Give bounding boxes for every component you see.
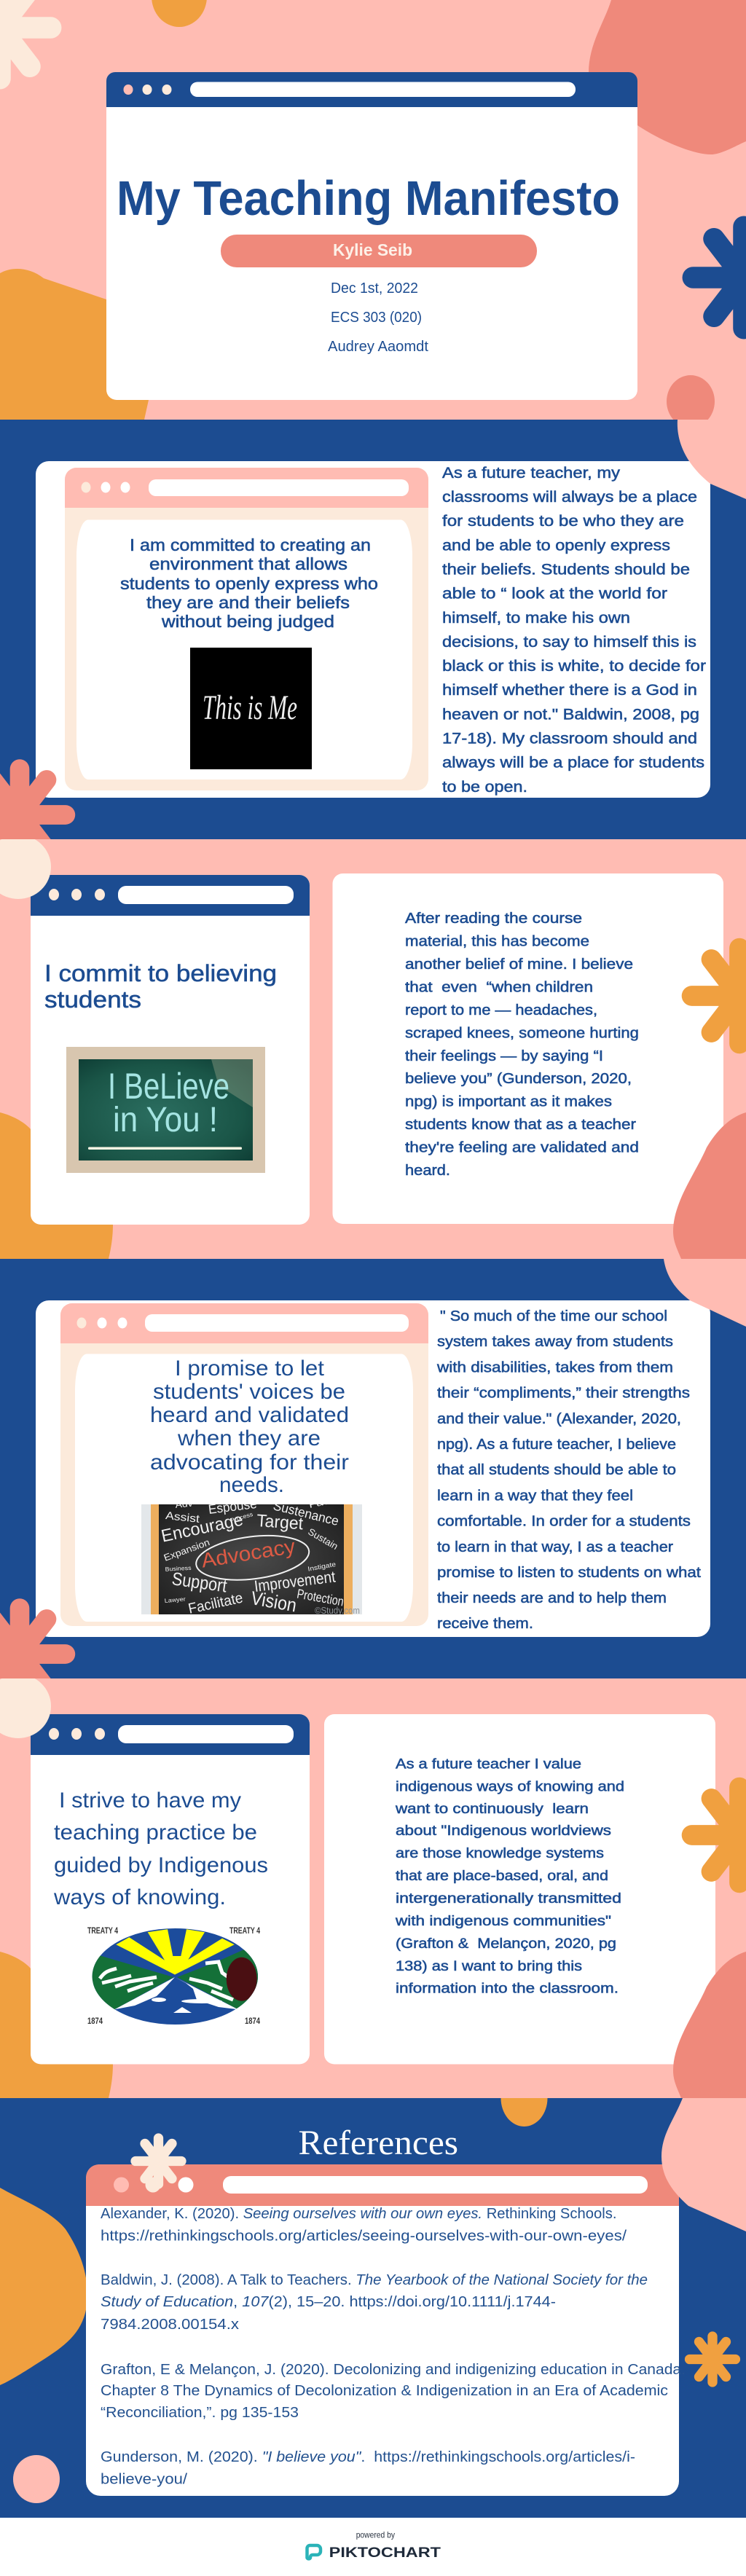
body text: intergenerationally transmitted (396, 1890, 621, 1907)
panel: title section (0, 0, 746, 428)
footer: powered by Piktochart: PIKTOCHART (329, 2545, 441, 2561)
image: advocacy chalkboard: Assist (165, 1509, 201, 1525)
image: advocacy chalkboard: Expansion (162, 1536, 211, 1563)
body text (395, 1756, 624, 1996)
image: advocacy chalkboard: Sustain (306, 1526, 340, 1552)
quote text (442, 464, 706, 796)
body text: are those knowledge systems (396, 1845, 604, 1861)
body text: want to continuously learn (395, 1801, 589, 1817)
quote text: " So much of the time our school (440, 1308, 667, 1324)
circle: orange top (152, 0, 207, 27)
blob: salmon top right (589, 0, 746, 154)
icon: salmon flower (0, 769, 66, 860)
reference list: Baldwin, J. (2008). A Talk to Teachers. The Yearbook of the National Society for the (101, 2271, 648, 2288)
image: chalkboard I Believe in You: I BeLieve (108, 1066, 229, 1107)
reference list: believe-you/ (101, 2471, 187, 2487)
right text card (332, 873, 723, 1224)
quote text: with disabilities, takes from them (436, 1359, 673, 1375)
image: advocacy chalkboard: Encourage (160, 1509, 245, 1547)
quote text: black or this is white, to decide for (442, 657, 706, 675)
reference list: Grafton, E & Melançon, J. (2020). Decolonizing and indigenizing education in Canada. (101, 2361, 686, 2378)
reference list: Chapter 8 The Dynamics of Decolonization & Indigenization in an Era of Academic (101, 2382, 668, 2399)
promise statement: advocating for their (150, 1450, 349, 1474)
body text: they're feeling are validated and (405, 1139, 639, 1155)
quote text: receive them. (437, 1615, 533, 1632)
blob: pink top right (678, 420, 746, 499)
references window (86, 2164, 686, 2496)
quote text: system takes away from students (437, 1333, 673, 1350)
commitment statement: students to openly express who (120, 574, 378, 593)
blob: salmon right (673, 1952, 746, 2098)
body text: their feelings — by saying “I (405, 1048, 603, 1064)
promise statement: needs. (219, 1473, 284, 1497)
body text: material, this has become (405, 934, 589, 950)
body text: report to me — headaches, (405, 1002, 597, 1018)
quote text: their needs are and to help them (437, 1590, 667, 1606)
icon: orange flower (690, 2336, 735, 2382)
right text card (324, 1714, 715, 2065)
circle: orange top (501, 2070, 548, 2127)
body text: students know that as a teacher (405, 1117, 636, 1133)
image: advocacy chalkboard: Improvement (254, 1567, 337, 1595)
reference list: Study of Education , 107(2), 15–20. https://doi.org/10.1111/j.1744- (101, 2293, 556, 2310)
heading (45, 964, 275, 1008)
heading (53, 1788, 268, 1909)
image: advocacy chalkboard: Instigate (307, 1560, 337, 1573)
circle: pink bottom left (13, 2455, 60, 2503)
outer white card (36, 1300, 710, 1637)
circle: cream top left (0, 1674, 51, 1738)
image: advocacy chalkboard: Fav (308, 1495, 331, 1510)
blob: orange bottom left (0, 269, 149, 420)
quote text: 17-18). My classroom should and (442, 730, 697, 747)
promise statement (150, 1356, 349, 1497)
browser window (65, 468, 428, 790)
circle: salmon lower right (667, 375, 715, 420)
quote text: himself, to make his own (442, 609, 630, 627)
heading: students (44, 986, 141, 1013)
promise statement: I promise to let (175, 1356, 325, 1381)
panel: commitment three (0, 1259, 746, 1700)
reference list: https://rethinkingschools.org/articles/seeing-ourselves-with-our-own-eyes/ (101, 2228, 627, 2244)
image: advocacy chalkboard: Sustenance (272, 1498, 340, 1528)
image: advocacy chalkboard: Target (256, 1511, 304, 1534)
image: advocacy chalkboard: Process (229, 1511, 254, 1524)
quote text (436, 1308, 701, 1632)
image: advocacy chalkboard: ©Study.com (315, 1605, 360, 1616)
reference list: “Reconciliation,”. pg 135-153 (101, 2404, 299, 2421)
body text: scraped knees, someone hurting (405, 1026, 639, 1042)
commitment statement: environment that allows (149, 554, 348, 573)
quote text: and be able to openly express (442, 536, 670, 554)
body text: heard. (405, 1163, 450, 1179)
body text: npg) is important as it makes (405, 1094, 612, 1110)
image: advocacy chalkboard: Facilitate (186, 1590, 244, 1617)
body text: (Grafton & Melançon, 2020, pg (396, 1936, 616, 1952)
quote text: heaven or not." Baldwin, 2008, pg (442, 705, 699, 723)
title window card (106, 72, 637, 400)
commitment statement: I am committed to creating an (130, 535, 371, 554)
body text: After reading the course (405, 911, 582, 927)
quote text: promise to listen to students on what (437, 1564, 701, 1581)
browser window (60, 1303, 428, 1626)
body text: believe you” (Gunderson, 2020, (405, 1071, 632, 1087)
panel: commitment four (0, 1674, 746, 2098)
image: chalkboard I Believe in You (66, 1047, 265, 1173)
image: advocacy chalkboard: Advocacy (200, 1535, 297, 1572)
quote text: and their value." (Alexander, 2020, (437, 1410, 681, 1427)
image: Treaty 4 emblem (80, 1925, 270, 2033)
commitment statement: without being judged (161, 612, 334, 631)
panel: commitment two (0, 835, 746, 1259)
image: Treaty 4 emblem: TREATY 4 (229, 1925, 260, 1936)
reference list: Gunderson, M. (2020). "I believe you" . https://rethinkingschools.org/articles/i- (101, 2449, 635, 2465)
icon: orange flower (692, 1788, 746, 1882)
heading: teaching practice be (54, 1821, 257, 1845)
body text: As a future teacher I value (396, 1756, 581, 1772)
blob: orange left (0, 1112, 113, 1259)
quote text: himself whether there is a God in (442, 681, 697, 699)
heading: I commit to believing (44, 960, 277, 986)
outer white card (36, 461, 710, 798)
circle: cream top left (0, 835, 51, 899)
quote text: comfortable. In order for a students (437, 1513, 691, 1530)
quote text: always will be a place for students (442, 753, 704, 771)
image: advocacy chalkboard: Support (170, 1568, 228, 1597)
blob: pink right (661, 2098, 746, 2231)
heading: I strive to have my (59, 1788, 241, 1813)
body text: with indigenous communities" (395, 1913, 611, 1929)
image: chalkboard I Believe in You: in You ! (113, 1101, 218, 1139)
image: advocacy chalkboard: Espouse (208, 1496, 258, 1517)
panel: references (0, 2070, 746, 2518)
name pill: Kylie Seib (333, 240, 412, 259)
body text: that even “when children (405, 979, 593, 995)
image: advocacy chalkboard: Adv (175, 1498, 194, 1510)
commitment statement (120, 535, 378, 631)
promise statement: students' voices be (153, 1380, 345, 1404)
quote text: their beliefs. Students should be (442, 561, 690, 578)
icon: Piktochart logo (307, 2545, 321, 2559)
promise statement: heard and validated (150, 1403, 349, 1427)
image: advocacy chalkboard: Protection (296, 1587, 345, 1609)
heading: guided by Indigenous (54, 1853, 268, 1877)
image: Treaty 4 emblem: 1874 (245, 2016, 260, 2026)
quote text: their “compliments,” their strengths (437, 1385, 690, 1402)
quote text: able to “ look at the world for (442, 584, 667, 602)
footer: powered by Piktochart: powered by (356, 2529, 395, 2540)
reference list: 7984.2008.00154.x (101, 2316, 240, 2333)
body text: 138) as I want to bring this (396, 1958, 582, 1974)
icon: cream flower (136, 2138, 181, 2184)
body text: that are place-based, oral, and (396, 1868, 608, 1884)
quote text: that all students should be able to (437, 1461, 676, 1478)
panel: commitment one (0, 420, 746, 860)
image: This is Me poster (190, 648, 312, 769)
quote text: As a future teacher, my (442, 464, 620, 482)
quote text: npg). As a future teacher, I believe (437, 1436, 676, 1453)
quote text: decisions, to say to himself this is (442, 633, 696, 651)
commitment statement: they are and their beliefs (146, 593, 350, 612)
image: advocacy chalkboard: Lawyer (164, 1595, 186, 1604)
icon: cream flower (0, 0, 51, 79)
date and course details: ECS 303 (020) (331, 310, 422, 326)
left window card (31, 1714, 310, 2065)
image: advocacy chalkboard (141, 1495, 362, 1617)
image: advocacy chalkboard: Vision (249, 1587, 299, 1617)
heading: ways of knowing. (53, 1885, 226, 1909)
image: Treaty 4 emblem: TREATY 4 (87, 1925, 118, 1936)
body text: about "Indigenous worldviews (396, 1823, 611, 1839)
quote text: learn in a way that they feel (437, 1487, 633, 1504)
image: advocacy chalkboard: Business (165, 1565, 192, 1573)
blob: orange left (0, 1952, 113, 2098)
reference list (101, 2205, 686, 2487)
quote text: to be open. (442, 778, 527, 796)
title: My Teaching Manifesto (117, 171, 620, 226)
icon: blue flower (693, 227, 746, 329)
blob: salmon right (673, 1112, 746, 1259)
icon: salmon flower (0, 1609, 66, 1700)
heading: References (299, 2124, 458, 2162)
body text: indigenous ways of knowing and (396, 1778, 624, 1794)
name pill (221, 235, 537, 267)
quote text: classrooms will always be a place (442, 488, 697, 506)
promise statement: when they are (177, 1426, 321, 1450)
left window card (31, 875, 310, 1225)
blob: pink top right (664, 1259, 746, 1327)
blob: orange left (0, 2188, 87, 2385)
quote text: to learn in that way, I as a teacher (437, 1539, 673, 1555)
quote text: for students to be who they are (442, 512, 684, 530)
date and course details (328, 280, 428, 355)
icon: orange flower (692, 949, 746, 1043)
body text: information into the classroom. (396, 1980, 619, 1996)
date and course details: Dec 1st, 2022 (331, 280, 418, 297)
date and course details: Audrey Aaomdt (328, 339, 428, 355)
body text (405, 911, 639, 1179)
image: Treaty 4 emblem: 1874 (87, 2016, 103, 2026)
reference list: Alexander, K. (2020). Seeing ourselves with our own eyes. Rethinking Schools. (101, 2205, 616, 2222)
body text: another belief of mine. I believe (405, 957, 633, 973)
footer: powered by Piktochart (0, 2518, 746, 2576)
image: This is Me poster: This is Me (203, 688, 297, 727)
